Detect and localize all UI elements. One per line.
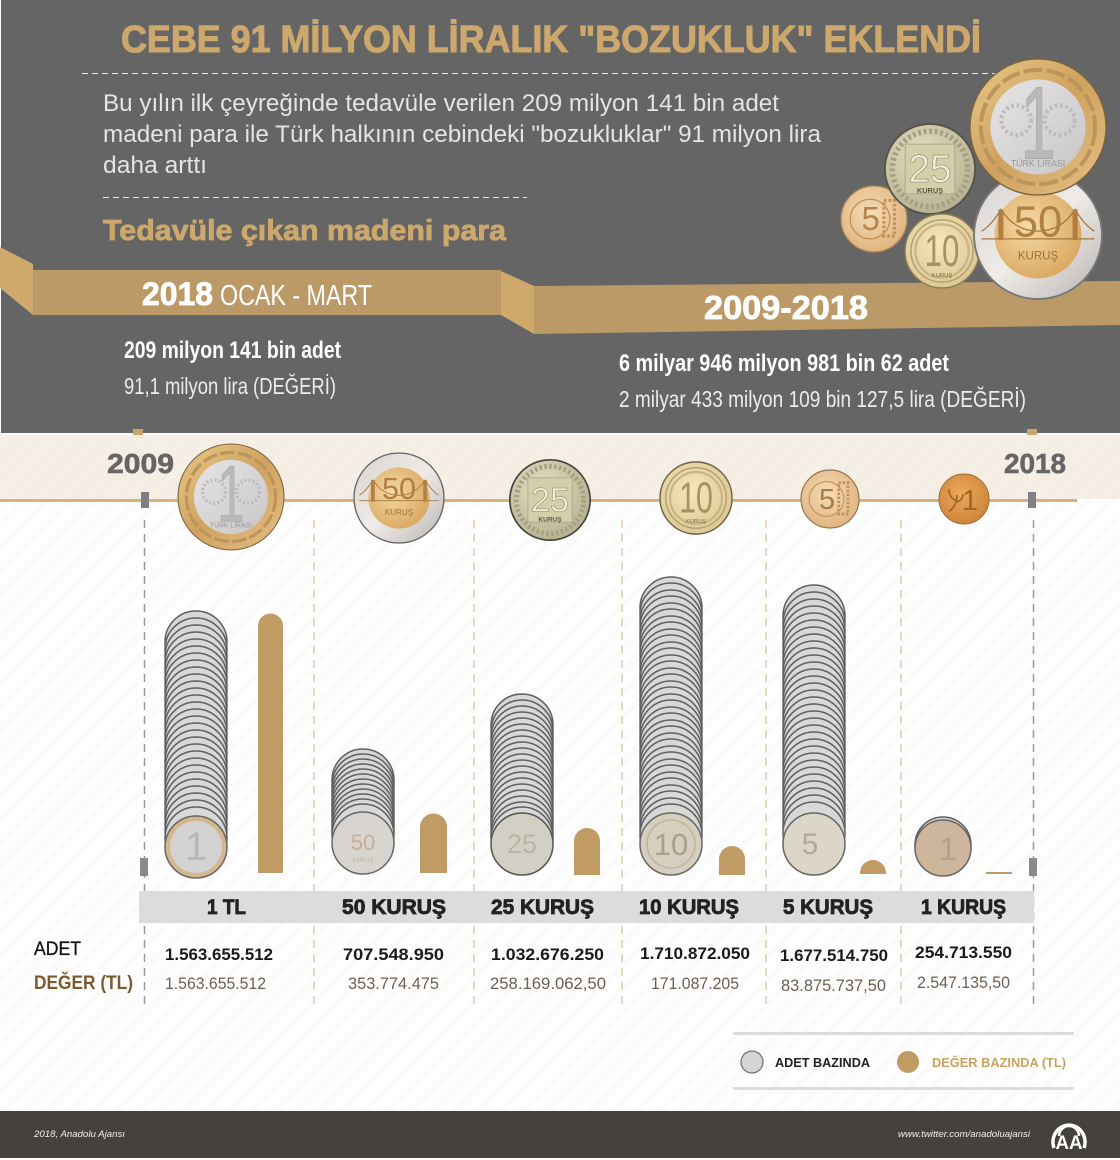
intro paragraph [103, 90, 822, 179]
stack front coin: 50 kuruş: KURUŞ [352, 858, 374, 864]
coin: 50 kuruş: KURUŞ [1018, 250, 1058, 262]
timeline coin: 10 kuruş: KURUŞ [686, 519, 706, 525]
stack front coin: 5 kuruş: 5 [802, 828, 818, 861]
coin: 5 kuruş [841, 186, 907, 252]
stack front coin: 50 kuruş: 50 [351, 830, 375, 855]
değer values: 258.169.062,50 [490, 974, 606, 993]
value bar: 1 TL [258, 614, 283, 873]
timeline coin: 25 kuruş: KURUŞ [538, 516, 562, 523]
adet values: 1.563.655.512 [165, 945, 273, 964]
legend [733, 1034, 1074, 1088]
value bar: 50 kuruş [420, 814, 447, 873]
coin stack: 10 kuruş [640, 577, 702, 875]
stats: 2018: 91,1 milyon lira (DEĞERİ) [124, 373, 336, 399]
stack front coin: 1 kuruş: 1 [939, 831, 957, 867]
coin stack: 50 kuruş [332, 749, 394, 874]
coin: 25 kuruş: 25 [909, 148, 951, 191]
timeline coin: 25 kuruş: 25 [531, 481, 569, 519]
stats: 2009-2018: 6 milyar 946 milyon 981 bin 62 adet [619, 350, 949, 377]
ribbon label: 2018: 2018 [142, 276, 213, 312]
coin stack: 1 TL [165, 611, 227, 878]
legend: DEĞER BAZINDA (TL) [932, 1055, 1066, 1070]
timeline coin: 1 TL: 1 [217, 449, 245, 539]
legend: ADET BAZINDA [775, 1055, 871, 1070]
ribbon label: 2018: OCAK - MART [220, 280, 372, 312]
timeline coin: 50 kuruş [354, 453, 444, 543]
subheading: Tedavüle çıkan madeni para [103, 215, 507, 247]
column dividers [144, 520, 1034, 1008]
value bar: 10 kuruş [719, 846, 745, 875]
stack front coin: 10 kuruş: 10 [654, 827, 688, 862]
table header band: 5 KURUŞ [783, 896, 873, 919]
stack front coin: 25 kuruş [491, 813, 553, 875]
row label: değer: DEĞER (TL) [34, 972, 133, 994]
stats: 2018: 209 milyon 141 bin adet [124, 337, 341, 364]
değer values: 2.547.135,50 [917, 973, 1010, 992]
timeline coin: 50 kuruş: KURUŞ [385, 508, 414, 517]
timeline coin: 5 kuruş [801, 470, 859, 528]
timeline coin: 10 kuruş [660, 462, 732, 534]
stack front coin: 5 kuruş [783, 813, 845, 875]
coin: 1 TL: 1 [1020, 64, 1056, 180]
footer bar: www.twitter.com/anadoluajansi [898, 1129, 1031, 1140]
coin: 25 kuruş [884, 123, 976, 215]
row label: adet: ADET [34, 939, 81, 960]
coin: 25 kuruş: KURUŞ [917, 186, 943, 195]
adet values: 707.548.950 [343, 945, 444, 964]
timeline coin: 1 kuruş: 1 [962, 485, 978, 517]
ribbon label: 2009-2018: 2009-2018 [704, 289, 868, 326]
header panel [0, 0, 1120, 433]
adet values: 1.710.872.050 [640, 944, 750, 963]
value bar: 1 kuruş [986, 872, 1012, 874]
timeline coin: 5 kuruş: 5 [819, 484, 835, 516]
intro paragraph: Bu yılın ilk çeyreğinde tedavüle verilen 209 milyon 141 bin adet [103, 90, 779, 117]
timeline band [0, 429, 1120, 508]
year label: 2009: 2009 [107, 448, 174, 479]
stack front coin: 1 TL: 1 [185, 825, 207, 869]
value bar: 5 kuruş [860, 860, 886, 874]
coin stack: 25 kuruş [491, 694, 553, 875]
stack front coin: 50 kuruş [332, 812, 394, 874]
coin stack: 1 kuruş [915, 817, 971, 876]
title: CEBE 91 MİLYON LİRALIK "BOZUKLUK" EKLENDİ [121, 19, 981, 61]
adet values: 1.677.514.750 [780, 946, 888, 965]
stack front coin: 25 kuruş: 25 [507, 829, 537, 859]
coin: 1 TL: TÜRK LİRASI [1011, 158, 1065, 168]
adet values: 254.713.550 [915, 943, 1012, 962]
timeline coin: 50 kuruş: 50 [382, 472, 416, 506]
table header band: 10 KURUŞ [639, 896, 739, 919]
adet values: 1.032.676.250 [491, 945, 604, 964]
coin stack: 5 kuruş [783, 585, 845, 875]
stats: 2009-2018: 2 milyar 433 milyon 109 bin 127,5 lira (DEĞERİ) [619, 386, 1026, 412]
adet values [165, 943, 1012, 965]
değer values [165, 973, 1010, 995]
timeline coin: 1 TL [178, 444, 284, 550]
table header band: 1 TL [207, 896, 246, 919]
stack front coin: 1 TL [165, 816, 227, 878]
stack front coin: 10 kuruş [640, 813, 702, 875]
coin: 10 kuruş: KURUŞ [932, 273, 952, 279]
timeline coin: 1 TL: TÜRK LİRASI [210, 521, 252, 530]
değer values: 83.875.737,50 [781, 976, 886, 995]
coin: 10 kuruş [905, 214, 979, 288]
coin: 10 kuruş: 10 [925, 227, 959, 276]
değer values: 353.774.475 [348, 974, 439, 993]
table header band: 25 KURUŞ [491, 896, 594, 919]
footer bar [0, 1111, 1120, 1158]
değer values: 171.087.205 [651, 974, 739, 993]
table header band [139, 891, 1034, 923]
coin: 5 kuruş: 5 [862, 200, 880, 237]
header coin group [841, 59, 1106, 299]
intro paragraph: daha arttı [103, 152, 207, 179]
table header band: 50 KURUŞ [342, 896, 446, 919]
değer values: 1.563.655.512 [165, 974, 266, 993]
icon: Anadolu Agency logo: AA [1056, 1133, 1083, 1154]
ribbon [0, 247, 1120, 334]
coin: 50 kuruş [974, 171, 1102, 299]
stats: 2018 [124, 337, 341, 399]
ribbon label: 2018 [142, 276, 372, 312]
coin: 1 TL [970, 59, 1106, 195]
stats: 2009-2018 [619, 350, 1026, 412]
value bar: 25 kuruş [574, 828, 600, 875]
axis markers [140, 858, 1037, 876]
icon: Anadolu Agency logo [1053, 1125, 1085, 1154]
table header band: 1 KURUŞ [921, 896, 1006, 919]
timeline coin: 25 kuruş [509, 459, 591, 541]
timeline coin: 1 kuruş [939, 474, 989, 524]
coin: 50 kuruş: 50 [1014, 198, 1062, 246]
year label: 2018: 2018 [1004, 448, 1066, 479]
timeline coin: 10 kuruş: 10 [679, 474, 713, 522]
intro paragraph: madeni para ile Türk halkının cebindeki "bozukluklar" 91 milyon lira [103, 121, 822, 148]
footer bar: 2018, Anadolu Ajansı [33, 1129, 125, 1140]
